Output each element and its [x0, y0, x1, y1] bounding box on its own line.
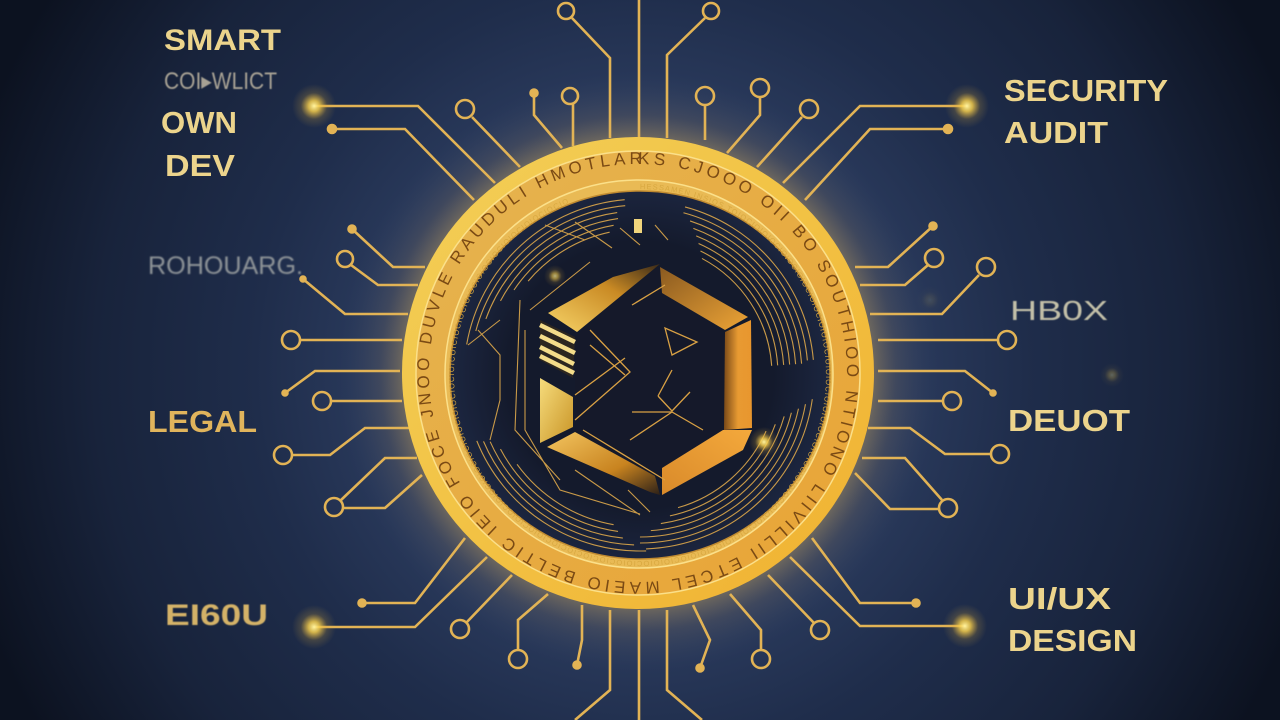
coin dark core	[450, 191, 830, 559]
central coin	[402, 137, 874, 609]
glowing nodes	[292, 84, 1124, 649]
label: security audit: SECURITY	[1004, 73, 1168, 108]
arcs: top left block	[426, 161, 854, 589]
label: legal: LEGAL	[148, 404, 257, 439]
sparkles	[544, 265, 779, 457]
labels, top left	[161, 24, 281, 183]
core micro text ring: HESSAMEN INSIOS TOIOCIOIOIOCIOIOCIOIOCIOIOCIOIOIOCIOIOIOCIOIOIOIOCIOIOIOCIOIOIOCIOIOIOCIOIOIOIOCIOIOIOCIOIOIOCIOIOCIOCIOCIOCIOCIOIOCIOIOCIOIOCIOIOCIOCIOIOCIOIOCIOCIOICOICIOCIOCIOIOCIOIOCIOCIOIOCIOIOCIOCIO	[449, 184, 831, 566]
hexagon top-left face	[548, 264, 660, 332]
hexagon emblem	[540, 264, 752, 495]
label: blurred left: ROHOUARG.	[148, 252, 303, 280]
arcs: lower right block	[443, 178, 837, 572]
label: deuot: DEUOT	[1008, 403, 1130, 438]
traces: right	[855, 222, 1016, 517]
hexagon inner line art	[575, 285, 703, 480]
traces: left	[274, 226, 425, 516]
arcs: bottom left block	[458, 193, 822, 557]
label: contract: COI▸WLICT	[164, 68, 277, 95]
label: security audit: AUDIT	[1004, 115, 1108, 150]
top connector tab	[634, 219, 642, 233]
circuit traces	[274, 0, 1016, 720]
core circuit arcs	[426, 161, 854, 589]
hexagon right face	[724, 320, 752, 430]
coin rim	[402, 137, 874, 609]
hexagon lower-left face	[547, 432, 660, 495]
traces: bottom	[314, 538, 965, 720]
hexagon left face	[540, 378, 573, 443]
label: own: OWN	[161, 105, 237, 140]
label: eigou: EI60U	[165, 599, 268, 632]
label: security audit	[1004, 73, 1168, 150]
traces: top	[456, 0, 818, 167]
label: smart: SMART	[164, 24, 281, 57]
hexagon top-right face	[660, 267, 748, 330]
arcs: right block	[427, 162, 853, 588]
hexagon lower-right face	[662, 430, 752, 495]
label: ui/ux design: UI/UX	[1008, 581, 1111, 616]
coin inscription band	[415, 150, 861, 596]
coin halo	[338, 73, 938, 673]
label: blurred right: HB0X	[1010, 295, 1108, 326]
label: dev: DEV	[165, 148, 235, 183]
label: ui/ux design	[1008, 581, 1137, 658]
label: ui/ux design: DESIGN	[1008, 623, 1137, 658]
hexagon striped face	[540, 320, 575, 378]
traces: upper corners	[314, 106, 967, 200]
